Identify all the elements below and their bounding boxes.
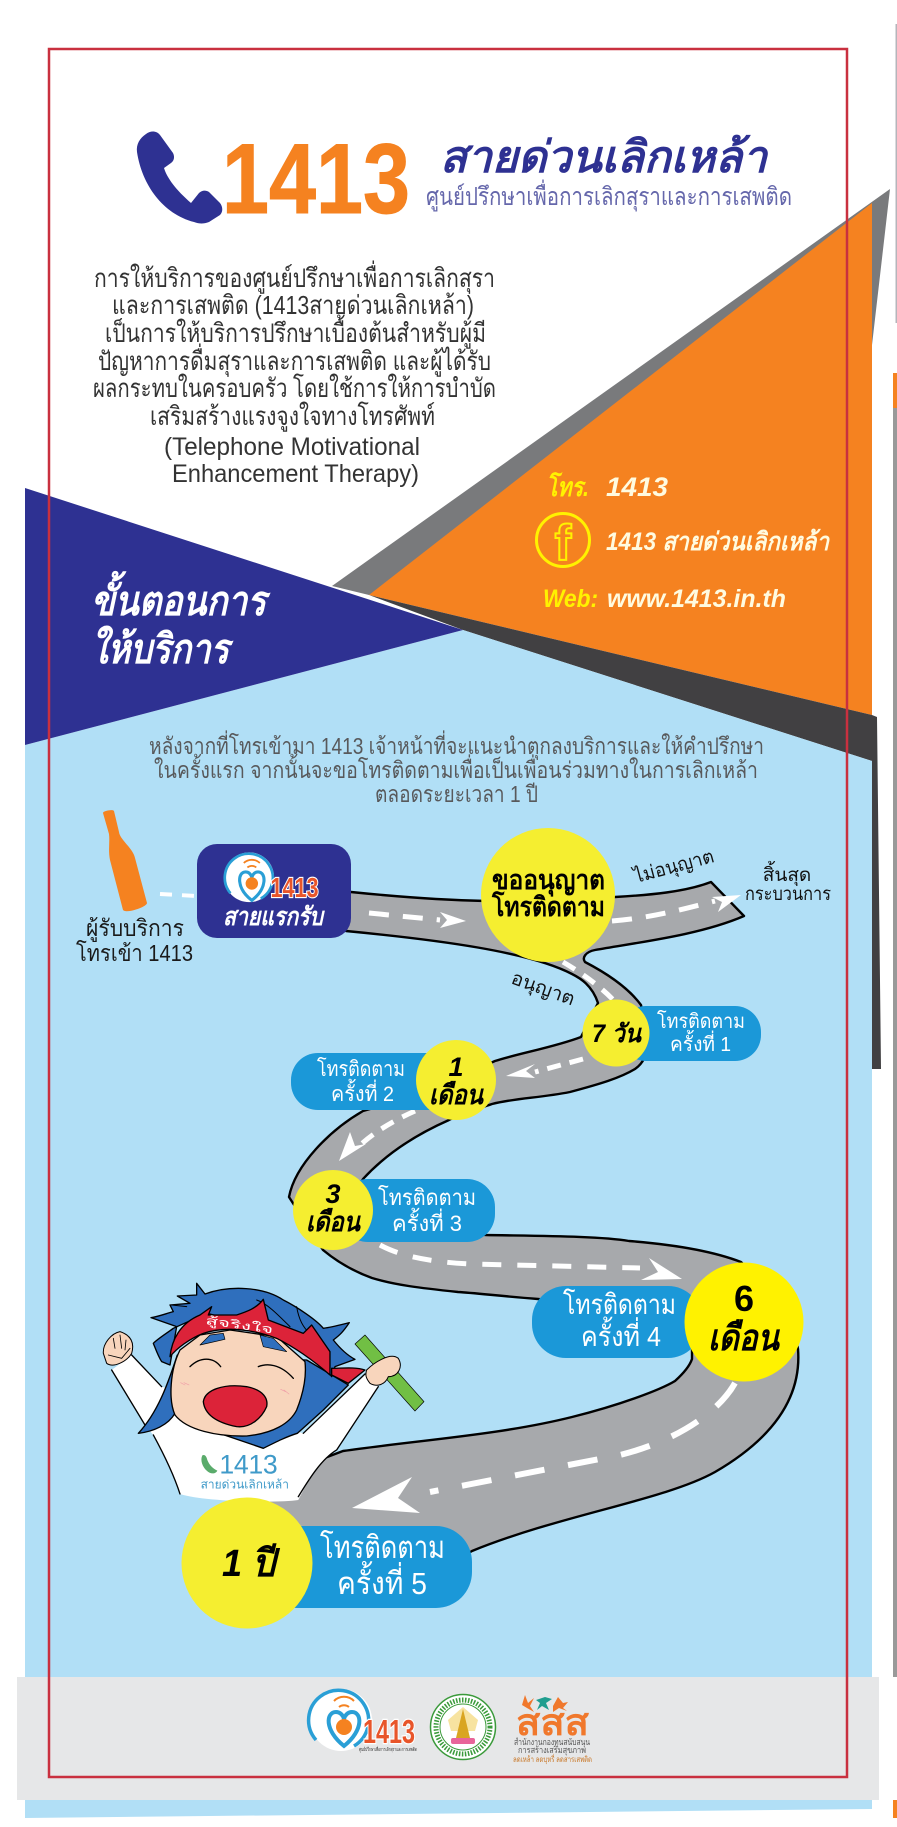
intro paragraph: ผลกระทบในครอบครัว โดยใช้การให้การบำบัด [93,373,496,403]
intro paragraph: Enhancement Therapy) [172,460,419,488]
step 2: 1 month: ครั้งที่ 2 [331,1079,394,1106]
process description [149,730,764,807]
step 3: 3 months: 3 [325,1179,341,1209]
road [240,882,798,1570]
decision node: ask permission: ขออนุญาต [492,865,605,897]
logo: ThaiHealth: สสส [516,1702,589,1743]
step 4: 6 months: เดือน [708,1317,780,1358]
intro paragraph: เสริมสร้างแรงจูงใจทางโทรศัพท์ [150,401,435,432]
road lane dashes and arrows [160,894,741,1513]
caller label: โทรเข้า 1413 [76,940,193,966]
step 2: 1 month [291,1040,496,1120]
step 5: 1 year: โทรติดตาม [320,1530,445,1565]
logo: 1413: 1413 [271,872,319,903]
contact details: www.1413.in.th [607,585,786,613]
logo: ThaiHealth [513,1695,592,1764]
footer band [17,1677,879,1800]
section heading [91,570,271,672]
logo: 1413: ศูนย์ปรึกษาเพื่อการเลิกสุราและการเสพติด [359,1746,417,1753]
branch label: not permitted: ไม่อนุญาต [630,845,717,889]
icon: facebook: f [555,515,572,571]
contact details: โทร. [546,471,589,502]
step 1: 7 days [582,1000,761,1066]
fist fingers [108,1335,130,1358]
step 5: 1 year: ครั้งที่ 5 [337,1561,427,1601]
step 2: 1 month: 1 [448,1052,464,1082]
hair strands [172,1300,310,1333]
contact details: 1413 [606,472,668,502]
hotline name: สายด่วนเลิกเหล้า [440,133,769,182]
step 3: 3 months: ครั้งที่ 3 [392,1208,462,1236]
step 1: 7 days: 7 วัน [592,1020,643,1048]
intro paragraph: เป็นการให้บริการปรึกษาเบื้องต้นสำหรับผู้มี [105,314,486,349]
step 1: 7 days: ครั้งที่ 1 [670,1030,731,1056]
step 4: 6 months: โทรติดตาม [563,1288,676,1320]
logo: university seal [430,1694,496,1760]
contact details [536,471,830,613]
caller label [76,915,193,966]
step 1: 7 days: โทรติดตาม [657,1010,745,1033]
step 5: 1 year: 1 ปี [222,1543,281,1585]
step 2: 1 month: โทรติดตาม [317,1057,405,1081]
shirt print: phone [201,1455,217,1473]
intro paragraph [93,260,496,488]
step 4: 6 months [532,1262,804,1382]
process description: หลังจากที่โทรเข้ามา 1413 เจ้าหน้าที่จะแนะนำตุกลงบริการและให้คำปรึกษา [149,730,764,760]
orange contact panel [369,203,872,715]
navy section triangle [25,488,463,745]
shirt print: number: 1413 [219,1449,278,1479]
section heading: ให้บริการ [91,625,234,672]
logo: ThaiHealth: สำนักงานกองทุนสนับสนุน [514,1737,590,1748]
caller label: ผู้รับบริการ [86,915,184,942]
headband lettering: สู้จริงใจ [205,1314,274,1336]
first contact card [197,844,351,938]
light blue process panel [25,630,872,1818]
headband [170,1299,330,1375]
back hair [138,1355,348,1448]
hotline number: 1413 [222,123,410,234]
step 3: 3 months: เดือน [306,1207,361,1237]
first contact card: สายแรกรับ [223,903,326,931]
header [137,123,792,234]
section heading: ขั้นตอนการ [91,570,271,624]
headband tail [332,1368,365,1383]
intro paragraph: ปัญหาการดื่มสุราและการเสพติด และผู้ได้รับ [98,343,491,377]
subtitle: ศูนย์ปรึกษาเพื่อการเลิกสุราและการเสพติด [426,179,792,212]
logo: 1413 [309,1689,417,1753]
contact details: Web: [543,585,598,613]
process description: ในครั้งแรก จากนั้นจะขอโทรติดตามเพื่อเป็นเพื่อนร่วมทางในการเลิกเหล้า [154,754,758,783]
character illustration [103,1283,424,1502]
step 3: 3 months: โทรติดตาม [378,1185,476,1210]
step 3: 3 months [293,1170,495,1250]
logo: 1413: 1413 [363,1713,415,1750]
mouth [203,1386,267,1427]
contact details: 1413 สายด่วนเลิกเหล้า [606,528,830,556]
logo: 1413 [224,852,319,903]
fist [103,1332,133,1365]
intro paragraph: และการเสพติด (1413สายด่วนเลิกเหล้า) [112,290,474,320]
step 4: 6 months: ครั้งที่ 4 [581,1316,661,1352]
branch label: permitted: อนุญาต [508,968,577,1011]
end label [745,861,831,905]
end label: กระบวนการ [745,884,831,905]
ruler [355,1335,424,1411]
logo: ThaiHealth: ลดเหล้า ลดบุหรี่ ลดสารเสพติด [513,1753,592,1764]
top hair [151,1283,355,1377]
icon: bottle [103,810,147,911]
cheeks [181,1383,289,1394]
edge strips at the right margin [893,24,897,1818]
decision node: ask permission: โทรติดตาม [491,890,605,922]
eyebrows [200,1333,287,1352]
icon: telephone [137,131,222,224]
hand [366,1356,400,1385]
eyes [190,1359,293,1378]
grey triangle behind orange panel [332,189,890,595]
shirt print: name: สายด่วนเลิกเหล้า [201,1478,289,1492]
end label: สิ้นสุด [763,861,811,887]
figures [522,1695,534,1712]
decision node: ask permission [481,828,615,962]
logo: ThaiHealth: การสร้างเสริมสุขภาพ [518,1745,586,1756]
face [171,1330,305,1436]
intro paragraph: การให้บริการของศูนย์ปรึกษาเพื่อการเลิกสุรา [94,260,495,294]
dark grey band [369,595,881,1069]
shirt and arms [112,1355,378,1502]
intro paragraph: (Telephone Motivational [164,433,420,461]
step 2: 1 month: เดือน [429,1080,484,1110]
step 4: 6 months: 6 [734,1278,754,1319]
step 5: 1 year [182,1498,472,1628]
icon: facebook [536,514,590,571]
process description: ตลอดระยะเวลา 1 ปี [375,781,538,807]
